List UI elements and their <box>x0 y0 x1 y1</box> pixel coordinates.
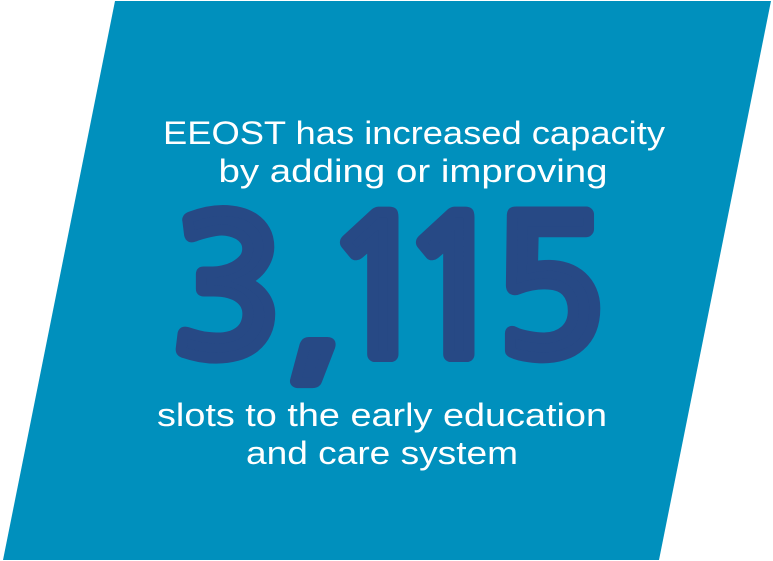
text: outro: and care system <box>246 435 518 471</box>
text: outro <box>157 397 607 471</box>
text: intro <box>163 115 665 189</box>
text: intro: by adding or improving <box>218 153 608 189</box>
text: intro: EEOST has increased capacity <box>163 115 665 151</box>
text: outro: slots to the early education <box>157 397 607 433</box>
big number: 3,115 <box>170 197 607 385</box>
